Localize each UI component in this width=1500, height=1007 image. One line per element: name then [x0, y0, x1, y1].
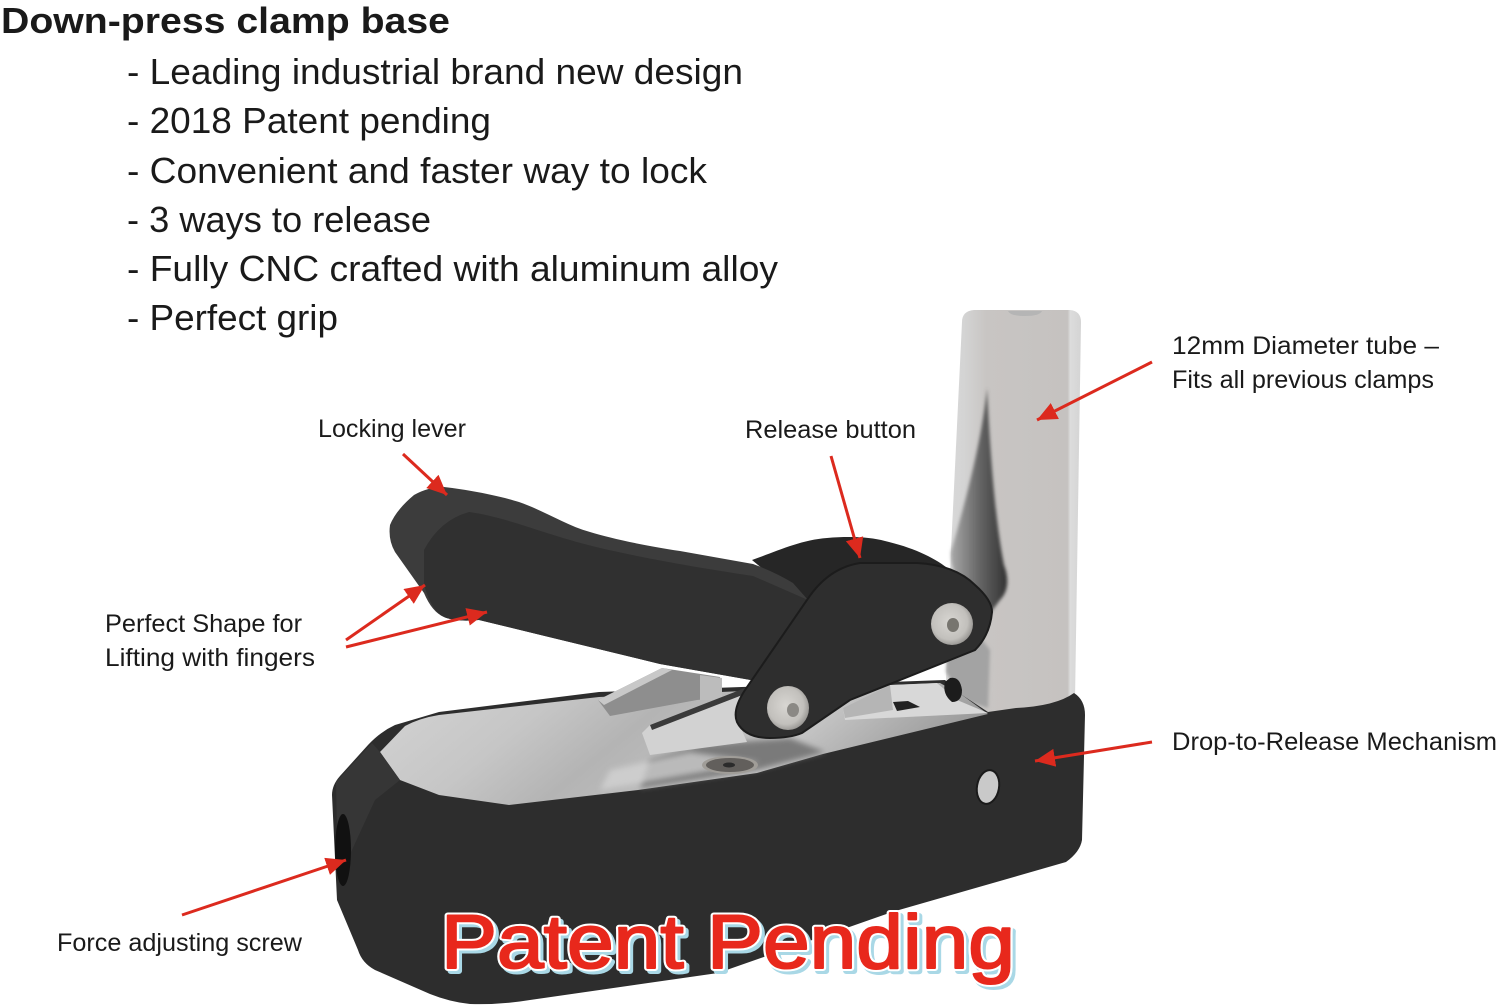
patent pending stamp: Patent Pending — [441, 900, 1015, 985]
feature list: - Perfect grip — [127, 297, 338, 338]
roller release button — [752, 537, 950, 610]
feature list — [127, 51, 778, 338]
upper screw — [931, 603, 973, 645]
arrow: release button — [831, 456, 860, 558]
arrow: force screw — [182, 860, 346, 915]
arrow: locking lever — [403, 454, 447, 495]
feature list: - 3 ways to release — [127, 199, 431, 240]
label: locking lever: Locking lever — [318, 415, 466, 443]
arrow: tube — [1037, 362, 1152, 420]
washer screw — [702, 756, 758, 774]
base body — [332, 680, 1085, 1004]
label: perfect shape: Lifting with fingers — [105, 644, 315, 672]
label: drop-to-release: Drop-to-Release Mechanism — [1172, 728, 1497, 756]
top plate — [380, 683, 988, 805]
plate shadow — [640, 738, 825, 788]
feature list: - Fully CNC crafted with aluminum alloy — [127, 248, 778, 289]
feature list: - Leading industrial brand new design — [127, 51, 743, 92]
tube — [946, 310, 1081, 715]
feature list: - 2018 Patent pending — [127, 100, 491, 141]
patent pending stamp: Patent Pending — [444, 903, 1018, 988]
feature list: - Convenient and faster way to lock — [127, 150, 708, 191]
lower screw — [767, 686, 809, 730]
arrow: shape edge — [346, 585, 425, 640]
upper metal finger — [598, 668, 722, 716]
clamp illustration — [332, 310, 1085, 1004]
plate highlights — [600, 752, 760, 790]
patent pending stamp: Patent Pending — [441, 900, 1015, 985]
arrow: shape face — [346, 612, 487, 647]
lower metal finger — [642, 688, 747, 755]
body facet — [336, 743, 400, 880]
label: tube: 12mm Diameter tube – — [1172, 332, 1439, 360]
adjusting screw hole — [335, 814, 351, 886]
arrow: drop-to-release — [1035, 742, 1152, 761]
arrows — [182, 362, 1152, 915]
locking lever — [390, 487, 808, 682]
label: tube: Fits all previous clamps — [1172, 366, 1434, 394]
link plate — [736, 563, 992, 738]
label: force adjusting screw: Force adjusting screw — [57, 929, 303, 957]
right wedge — [843, 678, 988, 720]
release pin — [974, 768, 1002, 806]
label: release button: Release button — [745, 416, 916, 444]
label: perfect shape: Perfect Shape for — [105, 610, 302, 638]
heading: Down-press clamp base — [1, 0, 450, 41]
